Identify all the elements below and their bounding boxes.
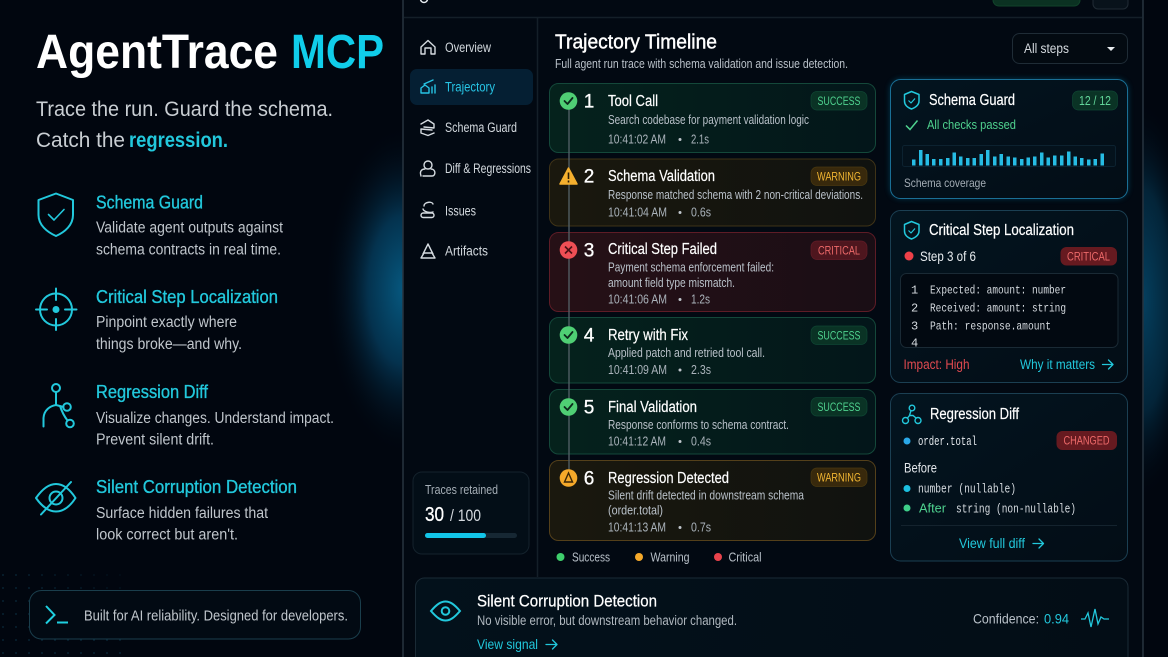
panel: silent corruption detection: View signal (477, 636, 538, 652)
panel: schema guard: 12 / 12 (1079, 94, 1111, 108)
step 4 card (550, 318, 876, 383)
step 4 card: Applied patch and retried tool call. (608, 345, 765, 360)
step 3 card: CRITICAL (818, 246, 860, 258)
step 5 card: 10:41:12 AM (608, 434, 666, 448)
status markers and step numbers: 4 (584, 326, 595, 346)
step 5 card: Final Validation (608, 399, 697, 416)
nav: overview: Overview (445, 40, 491, 55)
panel: regression diff: CHANGED (1064, 436, 1110, 448)
feature: silent corruption detection: Silent Corruption Detection (96, 477, 297, 497)
step 1 card (550, 84, 876, 152)
status markers and step numbers: 6 (584, 468, 594, 490)
step 3 card: 1.2s (691, 292, 710, 306)
status markers and step numbers: 2 (584, 166, 594, 188)
panel: silent corruption detection: Silent Corruption Detection (477, 592, 657, 610)
step 2 card: WARNING (817, 172, 861, 184)
panel: critical step localization: Impact: High (904, 357, 970, 372)
header fragments (420, 0, 1128, 9)
status markers and step numbers (560, 92, 595, 490)
step 5 card: Response conforms to schema contract. (608, 417, 789, 432)
panel: critical step localization: Step 3 of 6 (920, 249, 976, 264)
nav: schema guard: Schema Guard (445, 120, 517, 135)
feature: critical step localization: Critical Step Localization (96, 287, 278, 307)
panel: critical step localization: Why it matters (1020, 357, 1095, 372)
callout: built for developers: Built for AI reliability. Designed for developers. (84, 608, 348, 624)
panel: traces retained: 30 (425, 504, 444, 526)
step 6 card (550, 460, 876, 540)
legend: Success (572, 550, 610, 564)
panel: traces retained: Traces retained (425, 483, 498, 497)
panel: critical step localization: Critical Step Localization (929, 222, 1074, 239)
icon: shield (904, 222, 919, 239)
code block: 4 (911, 336, 918, 350)
heading: trajectory timeline: Trajectory Timeline (555, 32, 717, 54)
panel: regression diff: View full diff (959, 536, 1025, 551)
nav: overview (421, 40, 491, 55)
feature: silent corruption detection: look correct but aren't. (96, 526, 238, 544)
step 6 card: 0.7s (691, 520, 711, 534)
icon: crossed eye (36, 482, 76, 514)
panel: schema guard (890, 79, 1128, 198)
step 5 card (550, 390, 876, 454)
step 2 card: 10:41:04 AM (608, 204, 667, 220)
icon: graph nodes (902, 405, 921, 424)
step 1 card: 2.1s (691, 132, 709, 146)
step 2 card: Schema Validation (608, 168, 715, 185)
step 1 card: Search codebase for payment validation logic (608, 112, 809, 127)
nav: diff and regressions (420, 161, 531, 176)
feature: schema guard: schema contracts in real time. (96, 242, 281, 258)
icon: pulse (1081, 609, 1109, 627)
feature: regression diff: Visualize changes. Understand impact. (96, 410, 334, 427)
heading: trajectory timeline: Full agent run trace with schema validation and issue detection. (555, 56, 848, 71)
panel: silent corruption detection (416, 578, 1128, 657)
nav: trajectory: Trajectory (445, 80, 495, 94)
panel: silent corruption detection: No visible error, but downstream behavior changed. (477, 613, 737, 628)
step 3 card: Payment schema enforcement failed: (608, 260, 774, 274)
code block: 1 (911, 284, 918, 298)
panel: regression diff: Regression Diff (930, 406, 1020, 423)
step 4 card: Retry with Fix (608, 327, 688, 344)
step 3 card: amount field type mismatch. (608, 275, 735, 290)
panel: dashboard (403, 0, 1143, 657)
tagline: Catch the (36, 128, 125, 152)
step 2 card (550, 159, 876, 226)
nav: issues: Issues (445, 204, 476, 218)
feature: critical step localization: things broke—and why. (96, 336, 242, 353)
icon: shield check (38, 194, 73, 236)
feature: schema guard (38, 192, 284, 258)
panel: regression diff: order.total (918, 435, 977, 449)
icon: branching nodes (44, 384, 74, 427)
title: MCP (291, 26, 384, 79)
step 6 card: Regression Detected (608, 470, 729, 487)
icon: terminal prompt (46, 606, 68, 624)
confidence score: Confidence: (973, 610, 1039, 626)
dropdown: all steps: All steps (1024, 41, 1069, 56)
nav: issues (421, 202, 476, 218)
nav: diff and regressions: Diff & Regressions (445, 161, 531, 176)
sidebar navigation (410, 40, 533, 258)
arrow (546, 640, 557, 649)
step 5 card: 0.4s (691, 434, 711, 448)
step 3 card (550, 232, 876, 312)
panel: regression diff: Before (904, 460, 937, 476)
confidence score: 0.94 (1044, 610, 1069, 626)
tagline (36, 97, 333, 152)
panel: traces retained: / 100 (450, 506, 481, 525)
progress bar (425, 533, 517, 538)
panel: regression diff: number (nullable) (918, 482, 1016, 496)
status markers and step numbers: 5 (584, 398, 594, 418)
step 6 card: WARNING (817, 472, 861, 484)
panel: regression diff (890, 394, 1128, 561)
timeline panel (550, 84, 876, 564)
panel: traces retained (413, 472, 529, 554)
arrow (1033, 539, 1044, 548)
legend: Warning (650, 550, 690, 564)
feature: regression diff: Prevent silent drift. (96, 432, 214, 448)
step 3 card: Critical Step Failed (608, 241, 717, 258)
step 5 card: SUCCESS (818, 402, 861, 414)
feature: regression diff (44, 382, 334, 448)
feature: critical step localization (36, 287, 278, 353)
step 4 card: 10:41:09 AM (608, 362, 667, 377)
title: AgentTrace (36, 26, 278, 79)
step 4 card: SUCCESS (818, 330, 861, 342)
panel: schema guard: Schema coverage (904, 176, 986, 190)
icon: shield (904, 92, 919, 109)
step 6 card: 10:41:13 AM (608, 520, 666, 534)
icon: eye (431, 602, 460, 620)
panel: schema guard: All checks passed (927, 117, 1016, 132)
arrow (1102, 360, 1113, 369)
bar chart: schema coverage (902, 146, 1116, 166)
legend (556, 550, 762, 564)
code block: Received: amount: string (930, 302, 1066, 316)
step 6 card: (order.total) (608, 502, 663, 518)
step 6 card: Silent drift detected in downstream schema (608, 488, 805, 502)
step 1 card: Tool Call (608, 93, 658, 110)
feature: regression diff: Regression Diff (96, 382, 209, 402)
nav: artifacts (421, 244, 488, 258)
panel: regression diff: After (919, 500, 947, 516)
callout: built for developers (30, 590, 360, 639)
status markers and step numbers: 1 (584, 92, 594, 112)
feature: critical step localization: Pinpoint exactly where (96, 314, 237, 331)
nav: artifacts: Artifacts (445, 244, 488, 258)
panel: regression diff: string (non-nullable) (956, 502, 1076, 516)
timeline spine (568, 101, 570, 470)
tagline: regression. (129, 128, 228, 152)
code block: Expected: amount: number (930, 284, 1066, 298)
icon: crosshair (36, 288, 76, 330)
nav: schema guard (421, 120, 517, 136)
panel: schema guard: Schema Guard (929, 92, 1015, 109)
step 3 card: 10:41:06 AM (608, 292, 667, 306)
code block: Path: response.amount (930, 320, 1051, 334)
legend: Critical (728, 550, 762, 564)
step 1 card: SUCCESS (818, 96, 861, 108)
feature: silent corruption detection (36, 477, 297, 544)
status markers and step numbers: 3 (584, 240, 594, 262)
feature: schema guard: Schema Guard (96, 192, 203, 212)
panel: product intro (30, 26, 384, 639)
step 2 card: 0.6s (691, 204, 711, 220)
panel: critical step localization: CRITICAL (1067, 252, 1110, 264)
tagline: Trace the run. Guard the schema. (36, 97, 333, 121)
nav: trajectory (421, 80, 495, 94)
step 4 card: 2.3s (691, 362, 711, 377)
feature: silent corruption detection: Surface hidden failures that (96, 505, 269, 522)
panel: critical step localization (890, 210, 1128, 382)
step 1 card: 10:41:02 AM (608, 132, 666, 146)
code block (900, 274, 1118, 350)
step 2 card: Response matched schema with 2 non-critical deviations. (608, 187, 863, 202)
dropdown: all steps (1012, 34, 1128, 64)
feature: schema guard: Validate agent outputs against (96, 220, 284, 236)
code block: 3 (911, 320, 918, 334)
heading: trajectory timeline (555, 32, 848, 71)
code block: 2 (911, 302, 918, 316)
